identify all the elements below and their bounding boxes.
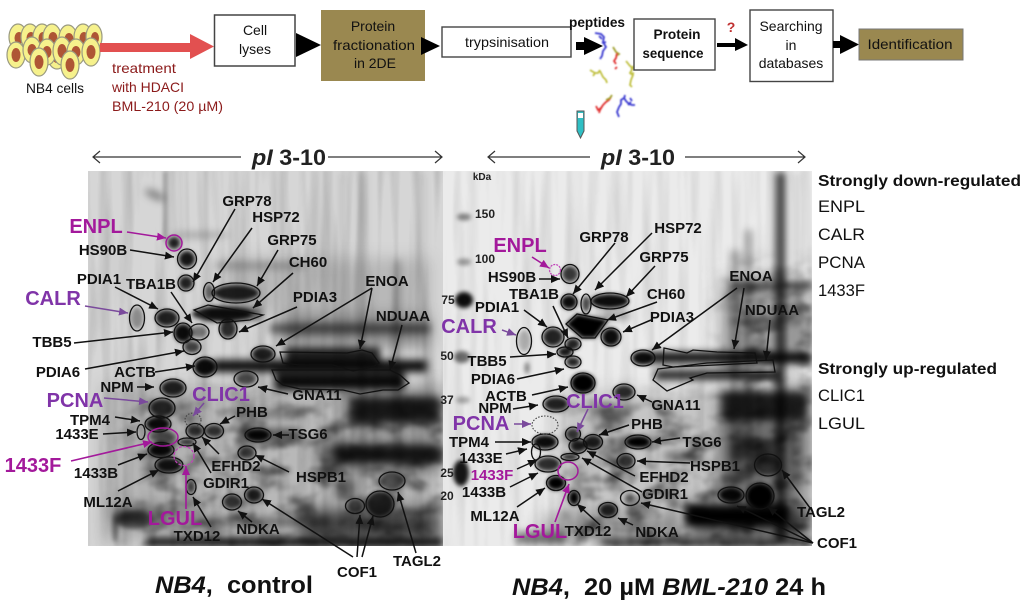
callout: PDIA3 treated	[623, 309, 694, 332]
callout: LGUL treated	[513, 484, 569, 543]
callout: GRP78	[193, 193, 272, 282]
callout: ML12A treated	[470, 488, 545, 525]
callout: COF1: COF1	[337, 564, 377, 581]
callout: TAGL2	[393, 492, 441, 570]
callout: HSP72 treated	[595, 220, 702, 290]
callout: CALR: CALR	[25, 288, 81, 310]
box: protein sequence: sequence	[642, 45, 704, 61]
callout: NPM treated	[478, 400, 538, 417]
legend: strongly down-regulated: 1433F	[818, 282, 865, 300]
callout: EFHD2: EFHD2	[211, 458, 261, 475]
legend: strongly down-regulated: ENPL	[818, 198, 865, 216]
callout: CH60 treated: CH60	[647, 286, 685, 303]
callout: ENPL treated: ENPL	[493, 235, 547, 257]
callout: HSPB1 treated	[637, 458, 740, 475]
callout: TSG6 treated	[652, 434, 722, 451]
treatment text: BML-210 (20 µM)	[112, 98, 223, 114]
molecular weight markers: 150	[475, 207, 495, 221]
arrow: to peptides	[576, 37, 603, 55]
callout: TXD12 treated: TXD12	[565, 523, 611, 540]
callout: COF1	[262, 499, 377, 581]
label: NB4 cells: NB4 cells	[26, 80, 84, 96]
callout: 1433F treated	[471, 460, 537, 484]
pI range, right gel: pI 3-10	[600, 145, 675, 170]
pI range, left gel	[93, 145, 442, 170]
callout: EFHD2	[202, 437, 261, 475]
callout: CLIC1: CLIC1	[192, 384, 250, 406]
legend: strongly up-regulated: Strongly up-regulated	[818, 361, 997, 378]
callout: LGUL	[148, 466, 202, 530]
callout: GRP75 treated	[626, 249, 689, 297]
box: trypsinisation: trypsinisation	[465, 34, 549, 50]
callout: CALR	[25, 288, 128, 313]
icon: test tube	[577, 111, 584, 138]
callout: ML12A: ML12A	[83, 494, 133, 511]
callout: PDIA1 treated	[475, 299, 547, 327]
callout: GRP78: GRP78	[222, 193, 272, 210]
callout: EFHD2 treated	[587, 451, 689, 486]
callout: TAGL2 treated	[782, 470, 845, 521]
callout: PHB treated	[599, 416, 663, 435]
callout: GDIR1 treated: GDIR1	[642, 486, 688, 503]
legend: strongly down-regulated	[818, 173, 1021, 300]
callout: PDIA6: PDIA6	[36, 364, 80, 381]
callout: PDIA6 treated	[471, 369, 564, 388]
callout: NDUAA	[376, 308, 430, 370]
box: searching in databases: databases	[759, 55, 823, 71]
callout: TSG6 treated: TSG6	[682, 434, 722, 451]
callout: GRP75 treated: GRP75	[639, 249, 689, 266]
callout: EFHD2 treated: EFHD2	[639, 469, 689, 486]
box: protein fractionation: in 2DE	[354, 55, 396, 71]
callout: 1433E	[55, 426, 136, 443]
callout: HS90B: HS90B	[79, 242, 127, 259]
box: protein fractionation: Protein	[351, 18, 395, 34]
callout: GRP75: GRP75	[267, 232, 317, 249]
molecular weight markers: 50	[440, 349, 454, 363]
callout: GDIR1	[193, 443, 249, 492]
molecular weight markers: 25	[440, 466, 454, 480]
callout: HSP72	[213, 209, 300, 282]
callout: HSPB1: HSPB1	[296, 469, 346, 486]
callout: ENOA: ENOA	[365, 273, 409, 290]
callout: PDIA1 treated: PDIA1	[475, 299, 519, 316]
callout: TBB5 treated: TBB5	[467, 353, 507, 370]
callout: TBA1B treated	[509, 286, 568, 338]
callout: 1433B	[74, 454, 147, 482]
callout: CH60 treated	[607, 286, 685, 320]
callout: ENOA treated	[652, 268, 773, 350]
callout: TAGL2: TAGL2	[393, 553, 441, 570]
box: protein fractionation: fractionation	[333, 37, 415, 53]
box: identification: Identification	[868, 36, 952, 52]
callout: NPM treated: NPM	[478, 400, 512, 417]
callout: PCNA treated: PCNA	[453, 413, 509, 435]
callout: NPM	[100, 379, 154, 396]
callout: 1433E: 1433E	[55, 426, 99, 443]
arrow: to database search	[717, 38, 748, 51]
callout: PHB: PHB	[236, 404, 268, 421]
callout: TSG6: TSG6	[288, 426, 328, 443]
callout: ENPL treated	[493, 235, 549, 268]
callout: CLIC1 treated: CLIC1	[566, 391, 624, 413]
label: peptides: peptides	[569, 15, 625, 30]
panel: control gel image	[88, 171, 443, 546]
callout: NPM: NPM	[100, 379, 134, 396]
callouts: control gel	[5, 193, 441, 581]
treatment text: treatment	[112, 60, 176, 76]
callout: COF1 treated: COF1	[817, 535, 857, 552]
molecular weight markers: 20	[440, 489, 454, 503]
callout: PHB	[220, 404, 268, 424]
callout: COF1 treated	[641, 503, 857, 552]
callout: ACTB: ACTB	[114, 364, 156, 381]
callout: TXD12: TXD12	[174, 528, 220, 545]
peptide molecules	[590, 33, 635, 117]
callout: CH60	[253, 254, 327, 308]
callout: LGUL: LGUL	[148, 508, 202, 530]
arrow: to trypsinisation	[421, 37, 440, 55]
callout: TXD12	[174, 497, 220, 545]
callout: TPM4 treated	[449, 434, 531, 451]
callout: ENOA treated: ENOA	[729, 268, 773, 285]
callout: ACTB treated: ACTB	[485, 388, 527, 405]
callout: PCNA	[47, 390, 148, 412]
protein spot outlines: treated gel	[516, 264, 782, 518]
callout: ML12A	[83, 470, 159, 511]
arrow: to identification	[833, 35, 859, 54]
caption: control gel: NB4, control	[155, 572, 313, 599]
callout: LGUL treated: LGUL	[513, 521, 567, 543]
highlighted spots: treated gel	[532, 264, 578, 480]
callout: 1433F	[5, 442, 152, 477]
box: cell lyses: Cell	[243, 22, 267, 38]
callout: GDIR1 treated	[582, 458, 688, 503]
callout: 1433F treated: 1433F	[471, 467, 513, 484]
callout: 1433F: 1433F	[5, 455, 61, 477]
legend: strongly down-regulated: Strongly down-regulated	[818, 173, 1021, 190]
callout: NDUAA treated: NDUAA	[745, 302, 799, 319]
callout: HS90B treated	[488, 269, 560, 286]
callout: PDIA6	[36, 351, 184, 381]
callout: 1433E treated	[459, 449, 527, 467]
box: protein fractionation	[321, 10, 425, 81]
callout: ACTB	[114, 364, 195, 381]
callout: CLIC1	[192, 384, 250, 416]
callout: NDKA: NDKA	[236, 521, 280, 538]
cluster of NB4 cells	[7, 24, 102, 79]
treatment text: with HDACI	[111, 79, 184, 95]
box: searching in databases	[750, 10, 833, 82]
callout: PDIA6 treated: PDIA6	[471, 371, 515, 388]
red treatment arrow	[100, 34, 214, 59]
box: protein sequence: Protein	[654, 26, 700, 42]
callout: PDIA1: PDIA1	[77, 271, 121, 288]
callout: NDKA treated	[618, 518, 679, 541]
legend: strongly down-regulated: PCNA	[818, 254, 865, 272]
callout: TBA1B	[126, 276, 192, 323]
callout: TBA1B treated: TBA1B	[509, 286, 559, 303]
treatment text	[111, 60, 223, 114]
pI range, right gel	[488, 145, 805, 170]
callout: NDKA	[236, 511, 280, 538]
molecular weight markers: kDa	[473, 172, 492, 183]
pI range, left gel: pI 3-10	[251, 145, 326, 170]
callout: GNA11: GNA11	[292, 387, 342, 404]
callout: TPM4: TPM4	[70, 412, 111, 429]
legend: strongly up-regulated	[818, 361, 997, 433]
callout: NDUAA treated	[745, 302, 799, 360]
callout: CH60: CH60	[289, 254, 327, 271]
callout: ENOA	[276, 273, 409, 349]
box: identification	[859, 29, 963, 60]
molecular weight markers: 100	[475, 252, 495, 266]
callout: GRP78 treated: GRP78	[579, 229, 629, 246]
callout: GRP75	[257, 232, 317, 286]
caption: treated gel: NB4, 20 µM BML-210 24 h	[512, 574, 826, 601]
callout: HSP72 treated: HSP72	[654, 220, 702, 237]
callout: TXD12 treated	[565, 504, 611, 540]
box: searching in databases: in	[786, 37, 796, 53]
callout: PDIA1	[77, 271, 158, 309]
box: trypsinisation	[442, 27, 571, 57]
callout: CALR treated: CALR	[441, 316, 497, 338]
callout: TBB5: TBB5	[32, 334, 72, 351]
callout: HSPB1	[255, 455, 346, 486]
callout: PDIA3 treated: PDIA3	[650, 309, 694, 326]
molecular weight markers: 37	[440, 393, 454, 407]
callout: GNA11	[258, 387, 342, 404]
callout: HSPB1 treated: HSPB1	[690, 458, 740, 475]
box: cell lyses	[214, 15, 295, 66]
callout: 1433B treated	[462, 473, 538, 501]
callout: TPM4 treated: TPM4	[449, 434, 490, 451]
molecular weight markers	[440, 172, 495, 503]
callout: GDIR1: GDIR1	[203, 475, 249, 492]
callout: HS90B treated: HS90B	[488, 269, 536, 286]
arrow: to fractionation	[296, 33, 321, 57]
callout: PHB treated: PHB	[631, 416, 663, 433]
callout: TBB5	[32, 332, 173, 351]
legend: strongly up-regulated: CLIC1	[818, 387, 865, 405]
callout: HS90B	[79, 242, 174, 259]
callout: 1433E treated: 1433E	[459, 450, 503, 467]
callout: 1433B: 1433B	[74, 465, 118, 482]
box: protein sequence	[634, 19, 715, 70]
question mark: ?	[727, 19, 735, 35]
box: searching in databases: Searching	[759, 18, 823, 34]
callout: GNA11 treated: GNA11	[651, 397, 701, 414]
protein spot outlines: control gel	[130, 249, 409, 517]
callouts: treated gel	[441, 220, 857, 552]
callout: ENPL: ENPL	[69, 216, 123, 238]
callout: HSP72: HSP72	[252, 209, 300, 226]
callout: PDIA3: PDIA3	[293, 289, 337, 306]
callout: ML12A treated: ML12A	[470, 508, 520, 525]
callout: PDIA3	[239, 289, 337, 332]
callout: GNA11 treated	[637, 395, 701, 414]
callout: PCNA: PCNA	[47, 390, 103, 412]
callout: TAGL2 treated: TAGL2	[797, 504, 845, 521]
panel: treated gel image	[443, 171, 812, 546]
legend: strongly up-regulated: LGUL	[818, 415, 865, 433]
callout: TPM4	[70, 412, 140, 429]
callout: TBB5 treated	[467, 353, 556, 370]
callout: NDKA treated: NDKA	[635, 524, 679, 541]
molecular weight markers: 75	[441, 293, 455, 307]
callout: ACTB treated	[485, 387, 568, 405]
callout: NDUAA: NDUAA	[376, 308, 430, 325]
callout: CLIC1 treated	[566, 391, 624, 432]
highlighted spots: control gel	[148, 235, 201, 466]
callout: 1433B treated: 1433B	[462, 484, 506, 501]
callout: GRP78 treated	[573, 229, 629, 294]
callout: ENPL	[69, 216, 166, 238]
legend: strongly down-regulated: CALR	[818, 226, 865, 244]
callout: TBA1B: TBA1B	[126, 276, 176, 293]
box: cell lyses: lyses	[239, 41, 271, 57]
